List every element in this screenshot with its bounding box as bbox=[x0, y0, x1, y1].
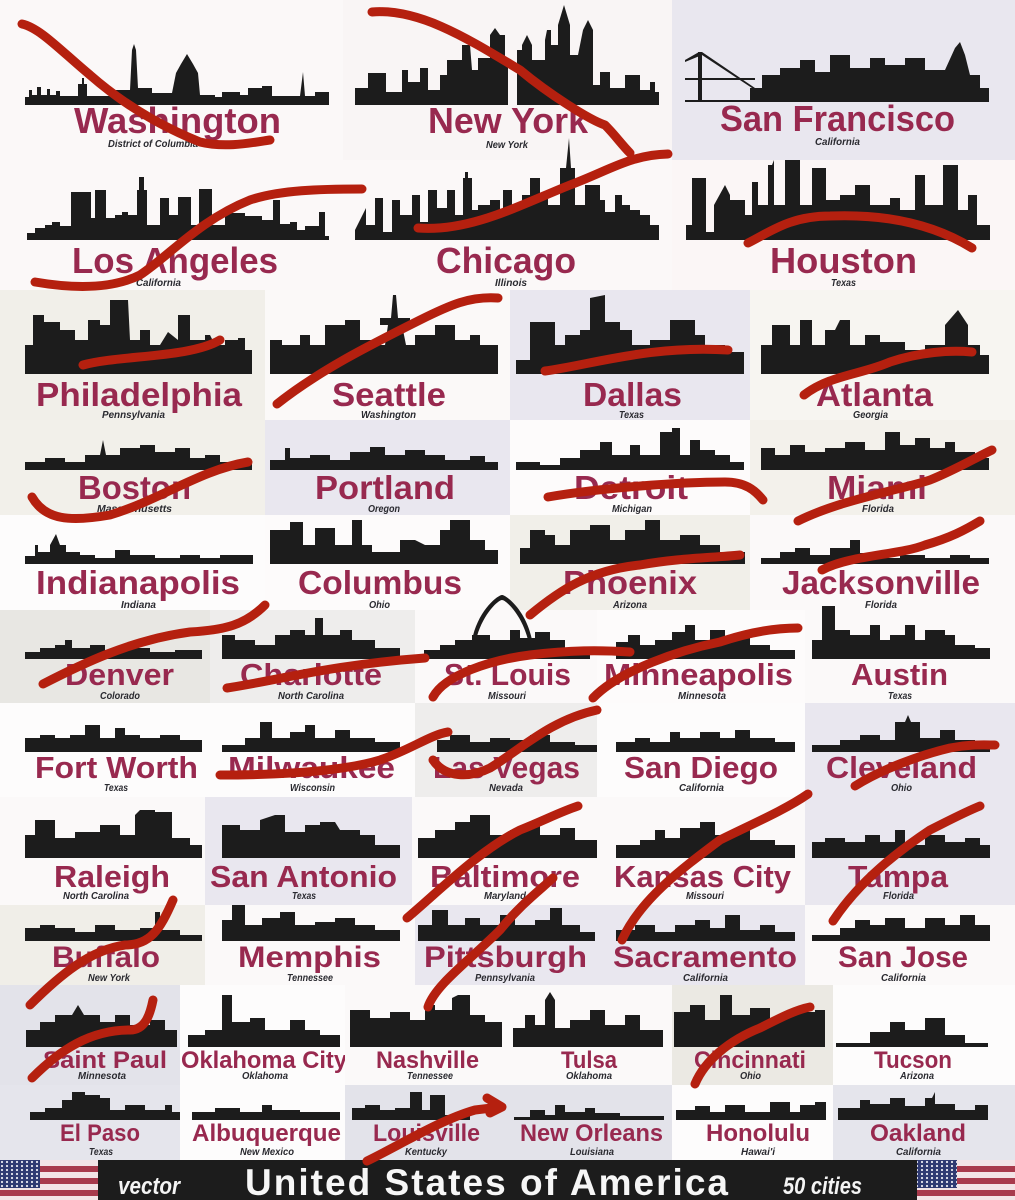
state label: California bbox=[679, 782, 724, 794]
city name: Fort Worth bbox=[35, 750, 198, 785]
skyline: Raleigh bbox=[25, 810, 202, 858]
skyline: Houston bbox=[686, 160, 990, 240]
skyline: Columbus bbox=[270, 520, 498, 564]
city name: Jacksonville bbox=[782, 564, 980, 601]
panel: Tampa bbox=[805, 797, 1015, 905]
skyline: Denver bbox=[25, 640, 202, 659]
state label: Oregon bbox=[368, 503, 400, 515]
skyline: Pittsburgh bbox=[418, 908, 595, 941]
state label: Georgia bbox=[853, 409, 888, 421]
state label: Arizona bbox=[899, 1070, 934, 1082]
skyline: Albuquerque bbox=[192, 1105, 340, 1120]
panel: Houston bbox=[672, 160, 1015, 290]
label: 50 cities: 50 cities bbox=[783, 1173, 862, 1200]
state label: Missouri bbox=[488, 690, 527, 702]
panel: Baltimore bbox=[412, 797, 610, 905]
city name: Chicago bbox=[436, 240, 576, 281]
state label: Oklahoma bbox=[242, 1070, 288, 1082]
city name: Cleveland bbox=[826, 750, 977, 785]
state label: Ohio bbox=[891, 782, 913, 794]
city name: Tucson bbox=[874, 1047, 952, 1074]
panel: Phoenix bbox=[510, 515, 750, 611]
city name: Kansas City bbox=[614, 859, 792, 894]
city name: Saint Paul bbox=[43, 1047, 167, 1074]
skyline: San Diego bbox=[616, 730, 795, 752]
state label: District of Columbia bbox=[108, 138, 198, 150]
panel: Milwaukee bbox=[210, 703, 415, 797]
panel: Los Angeles bbox=[0, 160, 343, 290]
city name: Nashville bbox=[376, 1047, 479, 1074]
city name: Houston bbox=[770, 240, 917, 281]
state label: Texas bbox=[104, 782, 128, 794]
city name: Sacramento bbox=[613, 941, 797, 974]
city name: Raleigh bbox=[54, 859, 170, 894]
city name: Washington bbox=[74, 100, 281, 141]
skyline: Kansas City bbox=[616, 822, 795, 858]
panel: San Diego bbox=[597, 703, 805, 797]
panel: El Paso bbox=[0, 1085, 180, 1160]
city name: Tampa bbox=[848, 859, 949, 894]
skyline: Portland bbox=[270, 447, 498, 470]
state label: Minnesota bbox=[678, 690, 726, 702]
state label: Louisiana bbox=[570, 1146, 614, 1158]
city name: Minneapolis bbox=[604, 657, 793, 692]
state label: California bbox=[136, 277, 181, 289]
skyline: Louisville bbox=[352, 1092, 502, 1120]
city name: Milwaukee bbox=[228, 750, 395, 785]
city name: Cincinnati bbox=[694, 1047, 806, 1074]
skyline: Tampa bbox=[812, 830, 990, 858]
panel: Philadelphia bbox=[0, 290, 265, 421]
panel: Jacksonville bbox=[750, 515, 1015, 611]
skyline: Tulsa bbox=[513, 992, 663, 1047]
city name: Charlotte bbox=[240, 657, 382, 692]
state label: North Carolina bbox=[63, 890, 129, 902]
state label: Florida bbox=[862, 503, 894, 515]
panel: Chicago bbox=[343, 138, 672, 290]
panel: New Orleans bbox=[507, 1085, 672, 1160]
skyline: Miami bbox=[761, 432, 989, 470]
panel: Minneapolis bbox=[597, 610, 805, 703]
panel: San Francisco bbox=[672, 0, 1015, 160]
panel: Kansas City bbox=[610, 797, 805, 905]
state label: Colorado bbox=[100, 690, 140, 702]
skyline: Boston bbox=[25, 440, 252, 470]
city name: Las Vegas bbox=[433, 750, 580, 785]
panel: New York bbox=[343, 0, 672, 160]
state label: Texas bbox=[888, 690, 912, 702]
city name: El Paso bbox=[60, 1120, 140, 1147]
city name: San Jose bbox=[838, 941, 968, 974]
skyline: Dallas bbox=[516, 295, 744, 374]
skyline: Charlotte bbox=[222, 618, 400, 659]
skyline: Fort Worth bbox=[25, 725, 202, 752]
panel: Sacramento bbox=[610, 905, 805, 985]
state label: Tennessee bbox=[287, 972, 333, 984]
skyline: St. Louis with arch bbox=[424, 595, 590, 659]
state label: Texas bbox=[89, 1146, 113, 1158]
city name: Albuquerque bbox=[192, 1120, 341, 1147]
panel: Charlotte bbox=[210, 610, 415, 703]
panel: Oakland bbox=[833, 1085, 1015, 1160]
city name: Atlanta bbox=[816, 376, 934, 413]
state label: Texas bbox=[831, 277, 856, 289]
state label: New York bbox=[486, 139, 529, 151]
panel: Seattle bbox=[265, 290, 510, 421]
panel: Boston bbox=[0, 420, 265, 515]
city name: Boston bbox=[78, 469, 191, 506]
skyline: Nashville bbox=[350, 995, 502, 1047]
footer banner bbox=[98, 1160, 917, 1200]
panel: Washington bbox=[0, 0, 343, 160]
state label: California bbox=[896, 1146, 941, 1158]
state label: Ohio bbox=[740, 1070, 762, 1082]
city name: Detroit bbox=[574, 469, 688, 506]
skyline: Cincinnati bbox=[674, 995, 825, 1047]
panel: Detroit bbox=[510, 420, 750, 515]
panel: Honolulu bbox=[672, 1085, 833, 1160]
city name: Indianapolis bbox=[36, 564, 240, 601]
state label: North Carolina bbox=[278, 690, 344, 702]
panel: Louisville bbox=[345, 1085, 507, 1160]
panel: Atlanta bbox=[750, 290, 1015, 421]
skyline: Atlanta bbox=[761, 310, 989, 374]
skyline: Oklahoma City bbox=[188, 995, 340, 1047]
state label: Ohio bbox=[369, 599, 391, 611]
skyline: San Antonio bbox=[222, 815, 400, 858]
state label: Nevada bbox=[489, 782, 523, 794]
city name: Oklahoma City bbox=[181, 1047, 348, 1074]
skyline: Philadelphia bbox=[25, 300, 252, 374]
state label: Pennsylvania bbox=[102, 409, 165, 421]
city name: Honolulu bbox=[706, 1120, 810, 1147]
skyline: Tucson bbox=[836, 1018, 988, 1047]
state label: Michigan bbox=[612, 503, 652, 515]
skyline: Milwaukee bbox=[222, 722, 400, 752]
skyline: Oakland bbox=[838, 1092, 988, 1120]
state label: New Mexico bbox=[240, 1146, 295, 1158]
skyline: Baltimore bbox=[418, 815, 597, 858]
icon: left US flag bbox=[0, 1160, 98, 1200]
state label: Missouri bbox=[686, 890, 725, 902]
skyline: Washington bbox=[25, 44, 329, 105]
skyline: Jacksonville bbox=[761, 540, 989, 564]
skyline: New York bbox=[355, 5, 659, 105]
panel: Dallas bbox=[510, 290, 750, 421]
state label: Wisconsin bbox=[290, 782, 335, 794]
state label: Florida bbox=[883, 890, 914, 902]
skyline: Saint Paul bbox=[26, 1005, 177, 1047]
panel: Buffalo bbox=[0, 905, 205, 985]
state label: Kentucky bbox=[405, 1146, 448, 1158]
state label: Pennsylvania bbox=[475, 972, 535, 984]
city name: San Diego bbox=[624, 750, 778, 785]
skyline: Memphis bbox=[222, 905, 400, 941]
skyline: Chicago bbox=[355, 138, 659, 240]
state label: Minnesota bbox=[78, 1070, 126, 1082]
city name: Denver bbox=[65, 657, 174, 692]
label: vector: vector bbox=[118, 1173, 181, 1200]
state label: Hawai'i bbox=[741, 1146, 776, 1158]
state label: Massachusetts bbox=[97, 503, 172, 515]
panel: Portland bbox=[265, 420, 510, 515]
panel: Tulsa bbox=[507, 985, 672, 1085]
city name: Louisville bbox=[373, 1120, 480, 1147]
city name: Tulsa bbox=[561, 1047, 618, 1074]
skyline: Sacramento bbox=[616, 915, 795, 941]
panel: Indianapolis bbox=[0, 515, 265, 611]
skyline: Detroit bbox=[516, 428, 744, 470]
skyline: Indianapolis bbox=[25, 534, 253, 564]
skyline: Buffalo bbox=[25, 912, 202, 941]
panel: Austin bbox=[805, 606, 1015, 703]
state label: Maryland bbox=[484, 890, 527, 902]
state label: California bbox=[815, 136, 860, 148]
city name: Dallas bbox=[583, 376, 682, 413]
state label: Texas bbox=[292, 890, 316, 902]
state label: Illinois bbox=[495, 277, 527, 289]
skyline: Austin bbox=[812, 606, 990, 659]
panel: Columbus bbox=[265, 515, 510, 611]
state label: California bbox=[881, 972, 926, 984]
panel: St. Louis bbox=[415, 595, 597, 703]
panel: Saint Paul bbox=[0, 985, 180, 1085]
panel: Nashville bbox=[345, 985, 507, 1085]
skyline: Seattle bbox=[270, 295, 498, 374]
skyline: Las Vegas bbox=[437, 735, 597, 752]
city name: New Orleans bbox=[520, 1120, 663, 1147]
skyline: Cleveland bbox=[812, 715, 990, 752]
icon: right US flag bbox=[917, 1160, 1015, 1200]
skyline: Los Angeles bbox=[27, 177, 329, 240]
panel: Tucson bbox=[833, 985, 1015, 1085]
city name: Phoenix bbox=[563, 564, 698, 601]
skyline: Minneapolis bbox=[616, 625, 795, 659]
city name: San Antonio bbox=[210, 859, 397, 894]
skyline: San Francisco bbox=[685, 42, 989, 102]
panel: Denver bbox=[0, 610, 210, 703]
city name: San Francisco bbox=[720, 98, 955, 139]
city name: Seattle bbox=[332, 376, 446, 413]
panel: San Jose bbox=[805, 905, 1015, 985]
panel: Fort Worth bbox=[0, 703, 210, 797]
city name: Oakland bbox=[870, 1120, 966, 1147]
panel: Las Vegas bbox=[415, 703, 597, 797]
panel: Pittsburgh bbox=[415, 905, 610, 985]
city name: Portland bbox=[315, 469, 455, 506]
state label: Arizona bbox=[612, 599, 647, 611]
city name: New York bbox=[428, 100, 589, 141]
city name: Memphis bbox=[238, 941, 381, 974]
state label: Indiana bbox=[121, 599, 156, 611]
skyline: El Paso bbox=[30, 1092, 180, 1120]
panel: Cincinnati bbox=[672, 985, 833, 1085]
city name: St. Louis bbox=[444, 657, 571, 692]
panel: San Antonio bbox=[205, 797, 412, 905]
skyline: Phoenix bbox=[520, 520, 745, 564]
panel: Cleveland bbox=[805, 703, 1015, 797]
panel: Miami bbox=[750, 420, 1015, 515]
state label: Washington bbox=[361, 409, 416, 421]
state label: Florida bbox=[865, 599, 897, 611]
city name: Columbus bbox=[298, 564, 462, 601]
panel: Raleigh bbox=[0, 797, 205, 905]
city name: Baltimore bbox=[430, 859, 580, 894]
skyline: New Orleans bbox=[514, 1105, 664, 1120]
city name: Miami bbox=[827, 469, 927, 506]
city name: Pittsburgh bbox=[424, 941, 587, 974]
city name: Philadelphia bbox=[36, 376, 243, 413]
state label: California bbox=[683, 972, 728, 984]
state label: Oklahoma bbox=[566, 1070, 612, 1082]
state label: New York bbox=[88, 972, 131, 984]
panel: Memphis bbox=[205, 905, 415, 985]
state label: Tennessee bbox=[407, 1070, 453, 1082]
state label: Texas bbox=[619, 409, 644, 421]
panel: Oklahoma City bbox=[180, 985, 348, 1085]
skyline: Honolulu bbox=[676, 1102, 826, 1120]
skyline: San Jose bbox=[812, 915, 990, 941]
city name: Buffalo bbox=[52, 941, 160, 974]
city name: Austin bbox=[851, 657, 948, 692]
panel: Albuquerque bbox=[180, 1085, 345, 1160]
city name: Los Angeles bbox=[72, 240, 278, 281]
